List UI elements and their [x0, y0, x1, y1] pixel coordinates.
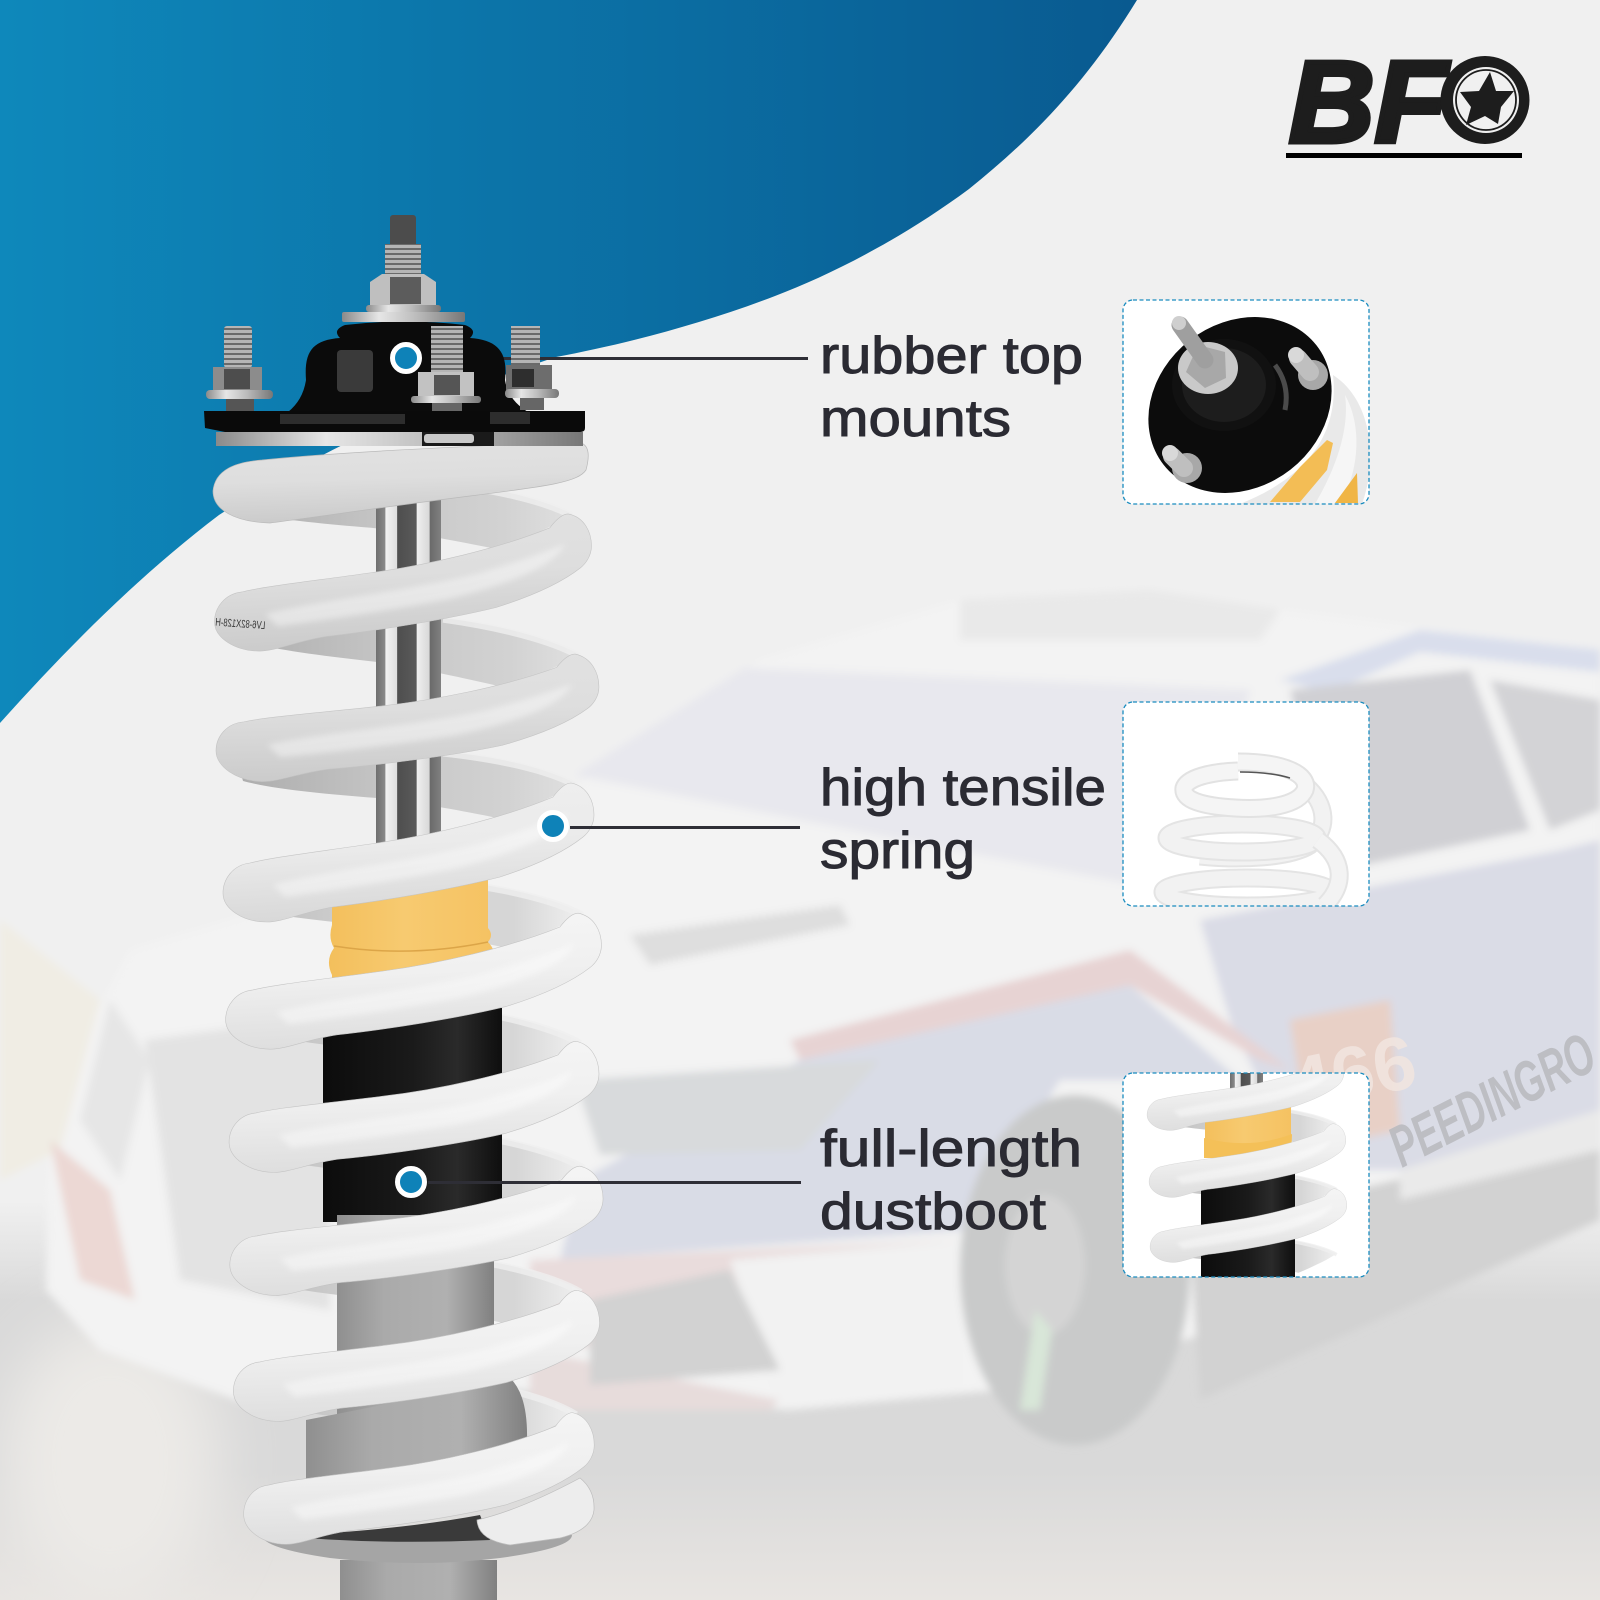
spring front coil segments: [213, 442, 603, 1552]
grey spring seat collar: [262, 1378, 572, 1600]
yellow bump stop: [329, 880, 496, 990]
callout line: full-length dustboot: [428, 1181, 801, 1184]
label: high tensile spring: [820, 759, 1106, 880]
background: faded car livery text: 466: [1282, 1019, 1424, 1129]
logo: underline: [1286, 153, 1522, 158]
mount: centre stud: [366, 215, 441, 312]
card 2 photo: white spring: [1163, 762, 1339, 906]
label: rubber top mounts: rubber top: [820, 327, 1083, 385]
label: high tensile spring: high tensile: [820, 759, 1106, 817]
logo: BFO wheel mark: [1286, 37, 1530, 167]
mount: front bolt: [411, 326, 494, 446]
mount: centre washer: [342, 312, 465, 322]
card 2 dashed border: [1123, 702, 1369, 906]
card 1 photo: top mount: [1148, 316, 1369, 504]
product: coilover strut: [204, 215, 603, 1600]
background: ground shadow: [0, 1200, 1600, 1600]
label: high tensile spring: spring: [820, 822, 975, 880]
card 1 dashed border: [1123, 300, 1369, 504]
mount: plate reflections: [280, 412, 530, 424]
marker dot: dustboot: [398, 1168, 424, 1196]
detail card: rubber top mount: [1122, 299, 1370, 505]
card 3 photo: spring over boot: [1147, 1057, 1347, 1277]
mount: right bolt: [505, 326, 559, 410]
logo: BF lettering: BF: [1289, 37, 1450, 167]
detail card: spring: [1123, 702, 1369, 906]
mount: dome reflection: [337, 350, 373, 392]
blue corner shape: [0, 0, 1137, 723]
label: rubber top mounts: [820, 327, 1083, 448]
top mount: [204, 215, 585, 446]
background: faded car livery text: [1282, 1019, 1600, 1180]
spring tail end: [477, 1478, 594, 1545]
callout line: high tensile spring: [570, 826, 800, 829]
label: full-length dustboot: dustboot: [820, 1183, 1047, 1241]
spring rear coil segments: [230, 477, 584, 1449]
mount: silver plate: [216, 432, 583, 446]
black dust boot: [323, 1008, 502, 1222]
piston rod: [376, 480, 441, 900]
spring printed part number: LV6-82X128-H: [215, 617, 266, 632]
callout line: rubber top mounts: [422, 357, 808, 360]
background: lighter lower-left ground: [0, 1320, 220, 1600]
card 3 dashed border: [1123, 1073, 1369, 1277]
marker dot: rubber top mount: [392, 344, 420, 372]
background: faded race car photo: [0, 590, 1600, 1445]
label: full-length dustboot: full-length: [820, 1120, 1082, 1178]
label: full-length dustboot: [820, 1120, 1082, 1241]
mount: rubber dome: [288, 322, 528, 412]
label: rubber top mounts: mounts: [820, 390, 1011, 448]
mount: left bolt: [206, 326, 273, 411]
detail card: dustboot: [1123, 1057, 1369, 1277]
marker dot: spring: [540, 812, 566, 840]
grey damper body: [337, 1215, 494, 1415]
logo: wheel with star: [1440, 56, 1530, 144]
mount: black plate: [204, 411, 585, 432]
